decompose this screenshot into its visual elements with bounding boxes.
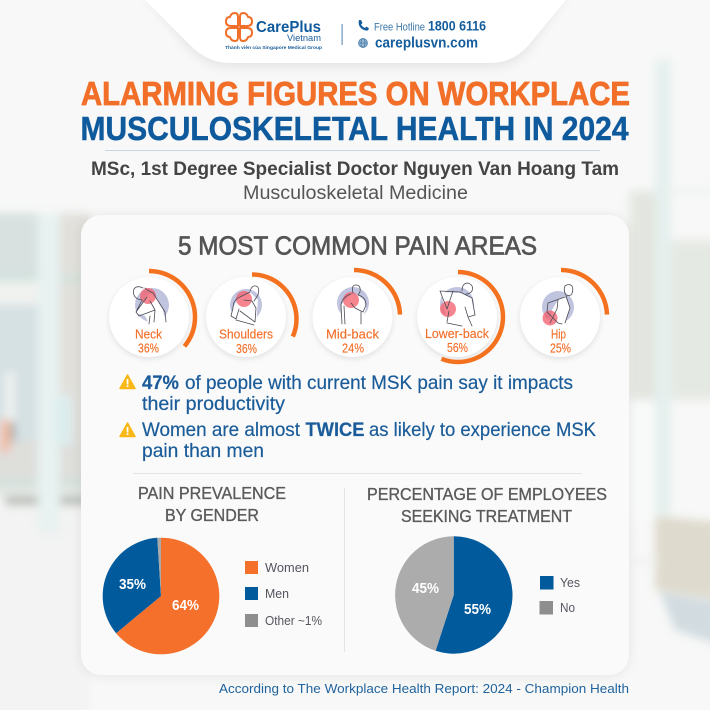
pain area: hip: Hip [551, 326, 566, 342]
chart heading: SEEKING TREATMENT [401, 506, 572, 526]
chart: employees seeking treatment [367, 484, 607, 654]
pain area: shoulders: Shoulders [219, 326, 273, 342]
contact details [342, 18, 486, 52]
pain area: mid-back [308, 270, 400, 362]
title: ALARMING FIGURES ON WORKPLACE [81, 75, 630, 112]
pie chart [103, 538, 219, 654]
legend: Women [265, 560, 309, 575]
pie chart: 64% [172, 597, 199, 614]
brand name: CarePlus [256, 19, 321, 36]
pie chart: 55% [464, 601, 491, 618]
callout: women: Women are almost [142, 419, 301, 441]
pain area: shoulders [206, 274, 296, 364]
callout: productivity: of people with current MSK pain say it impacts [185, 372, 573, 394]
icon: mid-back pain figure [337, 285, 369, 325]
legend: No [560, 600, 575, 615]
icon: shoulder pain figure [230, 286, 262, 325]
legend [245, 560, 322, 628]
pie chart: 35% [119, 576, 146, 593]
hotline: Free Hotline [374, 22, 425, 34]
chart heading: BY GENDER [165, 505, 259, 525]
pain area: lower-back: Lower-back [425, 326, 489, 341]
icon: hip pain figure [542, 284, 574, 326]
callout: women: TWICE [306, 419, 364, 441]
pie chart [395, 536, 513, 654]
callout: productivity: 47% [142, 372, 179, 394]
logo [225, 13, 322, 50]
chart heading [367, 484, 607, 526]
icon: warning [120, 423, 135, 436]
pain area: mid-back: Mid-back [326, 326, 379, 342]
left side [0, 213, 40, 275]
heading: pain areas: 5 MOST COMMON PAIN AREAS [178, 232, 537, 260]
hotline number: 1800 6116 [428, 18, 486, 34]
pain area: neck [103, 271, 195, 363]
brand sub-name: Vietnam [287, 33, 321, 44]
chart: pain prevalence by gender [103, 483, 322, 654]
pain area: neck: 36% [138, 340, 159, 356]
icon: phone [359, 20, 369, 31]
pain area: shoulders: 36% [236, 341, 257, 356]
callout: women [120, 419, 596, 462]
specialty: Musculoskeletal Medicine [243, 183, 468, 204]
legend: Men [265, 586, 289, 601]
source footnote: According to The Workplace Health Report: 2024 - Champion Health [219, 681, 629, 696]
website: careplusvn.com [375, 36, 478, 52]
chart heading [138, 483, 286, 525]
icon: warning [120, 375, 135, 388]
pain area: neck: Neck [135, 326, 162, 342]
legend: Other ~1% [265, 613, 322, 628]
callout: women: pain than men [142, 440, 264, 462]
pie chart: 45% [412, 580, 439, 597]
icon: neck pain figure [134, 287, 169, 325]
icon: CarePlus clover of hearts [226, 13, 252, 41]
header tab [145, 0, 566, 66]
brand tagline: Thành viên của Singapore Medical Group [225, 45, 322, 50]
icon: globe [359, 39, 367, 47]
pain area: lower-back: 56% [447, 340, 468, 355]
callout: productivity: their productivity [142, 393, 285, 415]
pain area: mid-back: 24% [342, 340, 364, 356]
pain area: hip [515, 270, 607, 362]
title [80, 75, 630, 147]
title: MUSCULOSKELETAL HEALTH IN 2024 [80, 110, 629, 147]
author: MSc, 1st Degree Specialist Doctor Nguyen Van Hoang Tam [91, 159, 619, 180]
chart heading: PERCENTAGE OF EMPLOYEES [367, 484, 607, 504]
pain area: hip: 25% [550, 340, 571, 356]
panel: main card [81, 215, 629, 676]
legend: Yes [560, 575, 580, 590]
callout: productivity [120, 372, 573, 415]
callout: women: as likely to experience MSK [369, 419, 596, 441]
legend [540, 575, 580, 615]
pain area: lower-back [413, 272, 503, 362]
right side [630, 190, 656, 400]
chart heading: PAIN PREVALENCE [138, 483, 286, 503]
icon: lower-back pain figure [440, 283, 475, 326]
